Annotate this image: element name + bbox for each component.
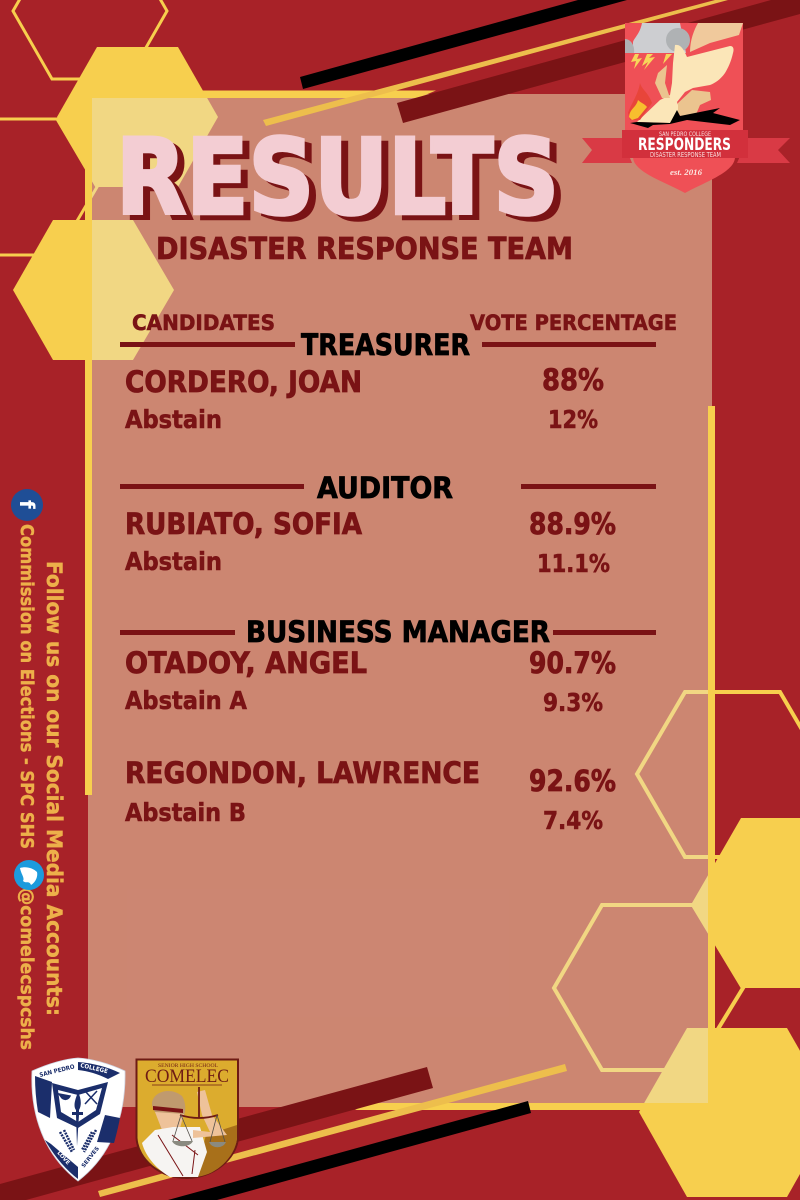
section: treasurer: 12% [548,405,598,434]
subtitle: DISASTER RESPONSE TEAM [156,232,573,267]
crest square [625,23,743,130]
logo: Responders crest: DISASTER RESPONSE TEAM [650,151,721,159]
panel: translucent results background [88,94,712,1107]
storm cloud [625,23,690,70]
section: business manager: 7.4% [543,806,603,835]
wing and body [637,45,734,123]
yellow frame [85,90,715,1110]
logo: Responders crest: RESPONDERS [638,135,731,154]
vertical social media text: Follow us on our Social Media Accounts: [42,561,66,1016]
section: auditor: 11.1% [537,549,610,578]
logo: San Pedro College shield: LOVE [56,1150,71,1166]
section: business manager: Abstain B [125,798,246,827]
bottom diagonal bars [0,1064,567,1200]
vertical social media text: Commission on Elections - SPC SHS [16,524,37,849]
logo: Responders crest: est. 2016 [670,168,702,177]
lower shield [633,157,735,193]
vertical social media text: @comelecspcshs [16,888,37,1050]
section: auditor: RUBIATO, SOFIA [125,507,362,541]
icon: facebook: f [15,500,39,509]
section: treasurer: TREASURER [301,328,470,362]
logo: San Pedro College shield: SAN PEDRO [39,1063,75,1079]
section: business manager: REGONDON, LAWRENCE [125,756,480,790]
section: treasurer: Abstain [125,405,222,434]
column heading: vote percentage: VOTE PERCENTAGE [470,311,677,335]
title: RESULTS [123,122,566,244]
section: auditor: Abstain [125,547,222,576]
logo: San Pedro College shield: COLLEGE [80,1062,108,1075]
icon: facebook [11,489,43,521]
section: auditor: AUDITOR [317,471,453,505]
section: auditor: 88.9% [529,507,616,541]
section: business manager: BUSINESS MANAGER [246,615,550,649]
flames [628,83,652,120]
black shadow [630,108,740,128]
section: business manager: Abstain A [125,686,247,715]
section: business manager: 9.3% [543,688,603,717]
logo: COMELEC shield [136,1060,238,1178]
logo: San Pedro College shield: SERVES [81,1146,101,1169]
icon: twitter [14,860,44,890]
logo: COMELEC shield: SENIOR HIGH SCHOOL [158,1064,218,1069]
logo: Responders crest [582,23,790,193]
ribbon tails [582,138,790,163]
ribbon centre [622,130,748,158]
section: auditor [120,471,656,578]
logo: COMELEC shield: COMELEC [145,1067,229,1087]
section: treasurer [120,328,656,434]
section: business manager: 92.6% [529,764,616,798]
column heading: candidates: CANDIDATES [132,311,275,335]
section: treasurer: 88% [542,363,604,397]
section: business manager: OTADOY, ANGEL [125,646,367,680]
title: RESULTS [116,116,559,238]
logo: San Pedro College shield [32,1058,125,1181]
logo: Responders crest: SAN PEDRO COLLEGE [659,130,711,138]
tan bits [655,65,711,119]
section: business manager: 90.7% [529,646,616,680]
section: business manager [120,615,656,835]
top diagonal bars [263,0,800,126]
vertical social media text [16,524,66,1050]
section: treasurer: CORDERO, JOAN [125,365,362,399]
tan arm [690,23,743,52]
